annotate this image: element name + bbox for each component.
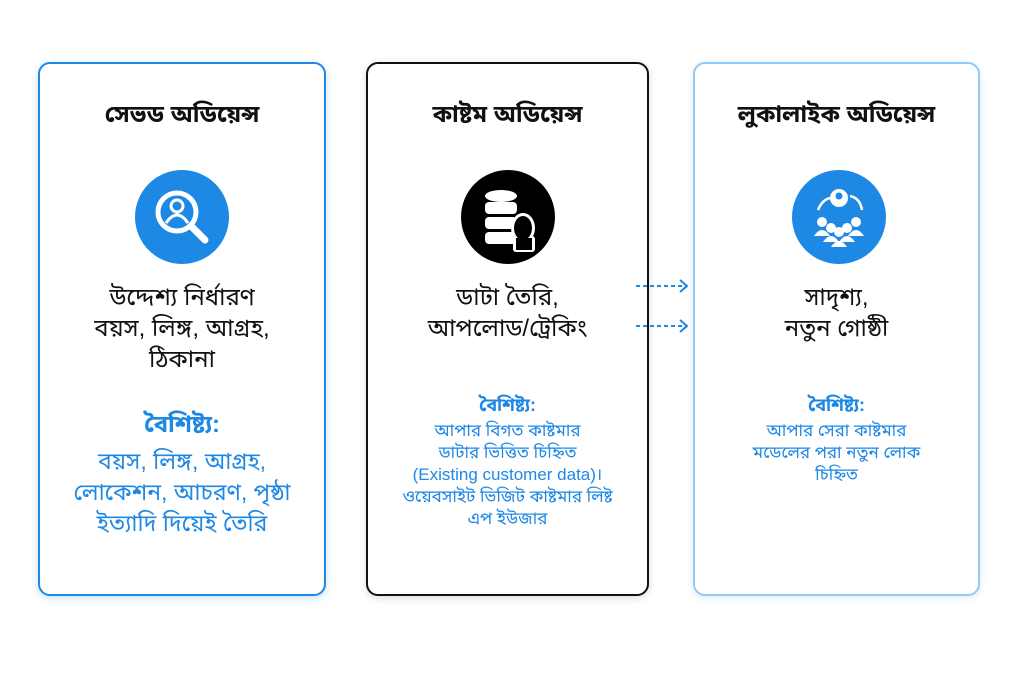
text: features heading: বৈশিষ্ট্য: [479,395,536,415]
panel: saved audience [38,62,326,596]
text: features heading: বৈশিষ্ট্য: [144,411,220,438]
arrow: bottom [636,319,688,333]
text: features body: ইত্যাদি দিয়েই তৈরি [97,510,267,536]
text: main: নতুন গোষ্ঠী [785,315,888,342]
text: features body [402,420,613,528]
text: features body: চিহ্নিত [815,465,858,484]
panel: custom audience [366,62,649,596]
arrow: top [636,279,688,293]
text: features body: ডাটার ভিত্তিত চিহ্নিত [439,443,576,462]
text: main: আপলোড/ট্রেকিং [428,315,587,342]
text: features body: (Existing customer data)। [413,465,602,484]
icon: group [792,170,886,264]
text: features body [752,420,920,484]
text: features body: আপার বিগত কাষ্টমার [435,421,580,440]
icon: magnifier person [135,170,229,264]
text: main: ডাটা তৈরি, [456,284,559,311]
heading: custom audience: কাষ্টম অডিয়েন্স [433,101,582,128]
text: features heading: বৈশিষ্ট্য: [808,395,865,415]
text: features body: ওয়েবসাইট ভিজিট কাষ্টমার লিষ্ট [402,487,613,506]
heading: lookalike audience: লুকালাইক অডিয়েন্স [738,101,935,128]
panel: lookalike audience [693,62,980,596]
text: features body: মডেলের পরা নতুন লোক [753,443,920,462]
text: main: সাদৃশ্য, [804,284,869,311]
text: features body: এপ ইউজার [468,509,547,528]
heading: saved audience: সেভড অডিয়েন্স [105,101,259,128]
text: main [784,284,888,342]
text: features body: বয়স, লিঙ্গ, আগ্রহ, [98,448,266,474]
text: main [428,283,587,342]
icon: database person [461,170,555,264]
text: main: উদ্দেশ্য নির্ধারণ [109,284,255,311]
text: features body: লোকেশন, আচরণ, পৃষ্ঠা [73,479,291,505]
text: features body [73,448,291,536]
text: main [94,282,270,373]
text: features body: আপার সেরা কাষ্টমার [767,421,906,440]
text: main: ঠিকানা [149,346,215,373]
text: main: বয়স, লিঙ্গ, আগ্রহ, [94,315,270,342]
